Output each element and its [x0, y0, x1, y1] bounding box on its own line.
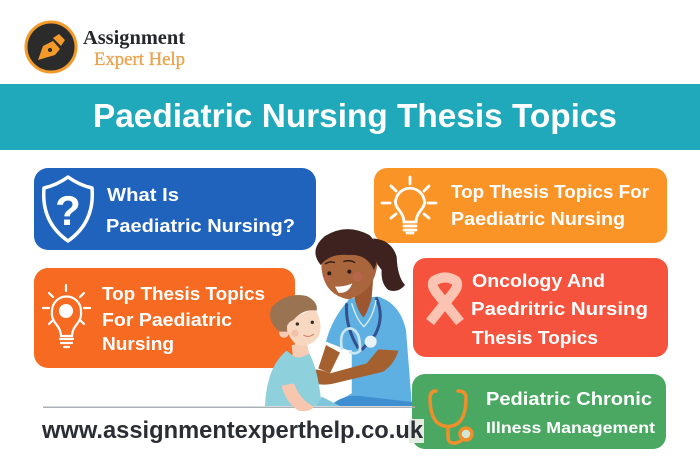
panel text: [486, 389, 656, 437]
logo text: Assignment: [83, 28, 186, 49]
title: Paediatric Nursing Thesis Topics: [93, 97, 617, 134]
icon: light bulb: [382, 177, 436, 233]
panel text: Top Thesis Topics For: [451, 182, 649, 202]
panel text: Thesis Topics: [472, 328, 598, 348]
panel text: Paedritric Nursing: [471, 299, 648, 319]
icon: shield question: ?: [55, 187, 81, 234]
logo text: [83, 28, 186, 70]
icon: stethoscope: [430, 391, 472, 443]
panel text: Top Thesis Topics: [102, 284, 265, 304]
illustration: nurse and child: [265, 229, 412, 411]
panel text: Nursing: [102, 334, 174, 354]
nurse: [305, 229, 412, 406]
panel text: For Paediatric: [102, 310, 232, 330]
title banner: [0, 84, 700, 150]
panel text: [471, 271, 648, 348]
logo: [26, 22, 186, 72]
panel: chronic illness: [412, 374, 666, 449]
panel text: Oncology And: [472, 271, 605, 291]
icon: light bulb with brain: [43, 285, 90, 347]
child: [265, 295, 340, 411]
logo text: Expert Help: [94, 49, 185, 70]
panel text: [451, 182, 649, 229]
panel text: Pediatric Chronic: [486, 389, 652, 409]
panel text: What Is: [107, 185, 179, 205]
panel: top thesis topics right: [374, 168, 667, 243]
panel: top thesis topics left: [34, 268, 295, 368]
panel text: [102, 284, 265, 354]
panel text: Paediatric Nursing?: [106, 216, 295, 236]
panel: what is paediatric nursing: [34, 168, 316, 250]
panel: oncology: [413, 258, 668, 357]
website footer: www.assignmentexperthelp.co.uk: [41, 417, 424, 444]
panel text: Illness Management: [486, 420, 656, 437]
panel text: Paediatric Nursing: [451, 209, 625, 229]
icon: awareness ribbon: [430, 278, 460, 322]
icon: shield question: [44, 177, 92, 241]
icon: pen nib logo: [26, 22, 76, 72]
panel text: [106, 185, 295, 236]
